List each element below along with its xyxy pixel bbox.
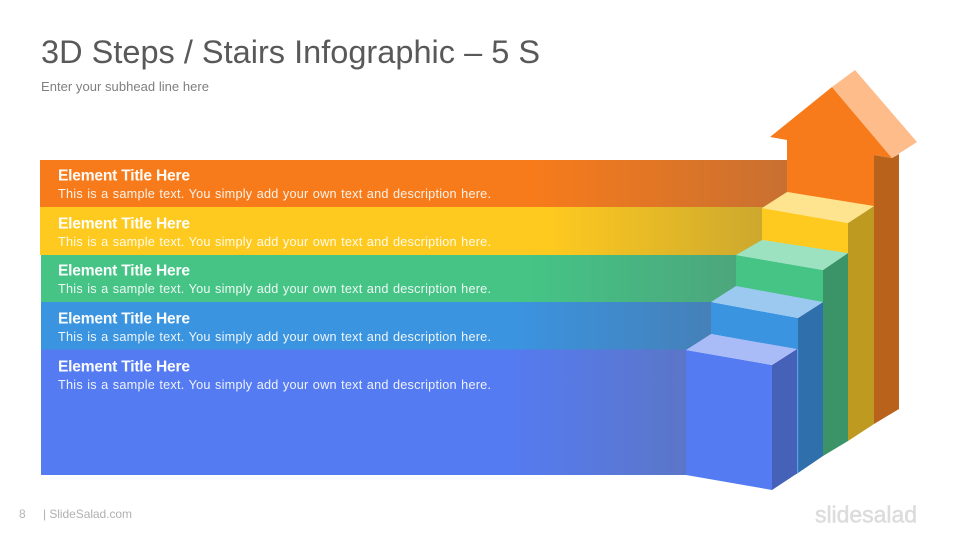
band 3: green: [41, 255, 737, 302]
band 3 text: This is a sample text. You simply add your own text and description here.: [58, 282, 491, 296]
step 2: blue: [711, 286, 823, 474]
title: 3D Steps / Stairs Infographic – 5 S: [41, 34, 540, 70]
band 1 text: This is a sample text. You simply add your own text and description here.: [58, 187, 491, 201]
arrow column: [770, 70, 917, 424]
footer link: | SlideSalad.com: [43, 507, 132, 521]
band 4 text: This is a sample text. You simply add your own text and description here.: [58, 330, 491, 344]
band 2: yellow: [40, 207, 763, 255]
band 2 text: This is a sample text. You simply add your own text and description here.: [58, 235, 491, 249]
band 5 text: This is a sample text. You simply add your own text and description here.: [58, 378, 491, 392]
logo: slidesalad: [815, 502, 917, 528]
subhead: Enter your subhead line here: [41, 79, 209, 94]
band 5 title: Element Title Here: [58, 358, 190, 376]
band 2 title: Element Title Here: [58, 216, 190, 232]
step 3: green: [736, 240, 848, 456]
band 1 title: Element Title Here: [58, 168, 190, 184]
band 1: orange: [40, 160, 788, 208]
band 4: blue: [41, 302, 712, 350]
step 1: indigo: [686, 334, 797, 490]
step 4: yellow: [762, 192, 874, 441]
band 3 title: Element Title Here: [58, 262, 190, 280]
band 5: indigo: [41, 350, 687, 475]
3D arrow stairs: [686, 70, 917, 490]
band 4 title: Element Title Here: [58, 310, 190, 328]
page number: 8: [19, 507, 26, 521]
